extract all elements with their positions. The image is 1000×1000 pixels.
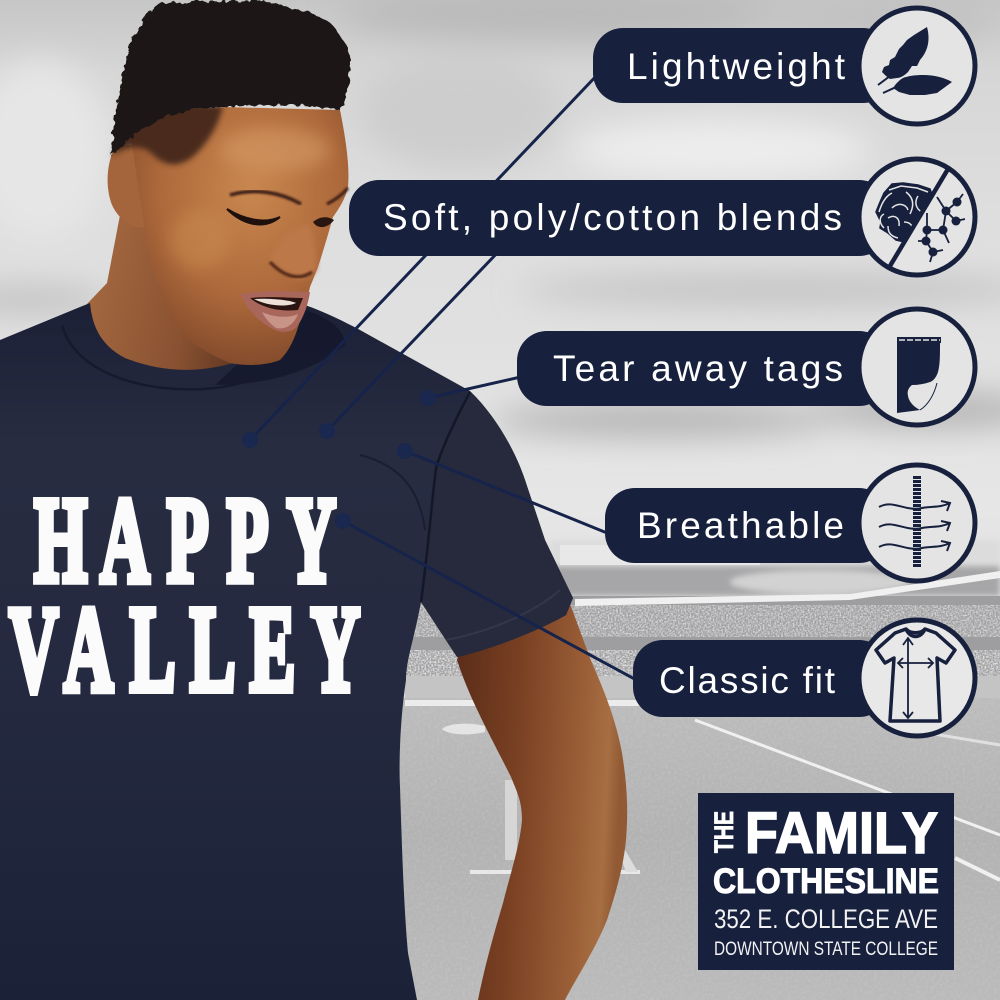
callout: Tear away tags <box>517 309 975 425</box>
callout: Soft, poly/cotton blends <box>349 159 975 275</box>
connector: Lightweight <box>242 72 600 448</box>
model: hair <box>112 0 350 164</box>
text: VALLEY: VALLEY <box>9 583 360 717</box>
logo: The Family Clothesline <box>698 793 954 970</box>
text: HAPPY: HAPPY <box>34 474 336 608</box>
text: FAMILY: FAMILY <box>745 801 938 866</box>
connector: Classic fit <box>335 513 640 682</box>
model: face <box>130 107 348 365</box>
text: location: DOWNTOWN STATE COLLEGE <box>714 939 938 960</box>
text: CLOTHESLINE: CLOTHESLINE <box>713 862 939 901</box>
model: t-shirt <box>0 303 573 1000</box>
icon: tear away tag <box>897 337 941 413</box>
connector: Soft blends <box>319 250 500 439</box>
background: football field <box>400 698 1000 1000</box>
label: Classic fit <box>659 660 836 701</box>
text: THE: THE <box>709 811 739 853</box>
pill <box>349 180 889 256</box>
background: stadium stands and crowd <box>405 540 1000 700</box>
icon: feathers <box>878 27 952 95</box>
callout: Classic fit <box>633 620 975 736</box>
background: stadium sky <box>0 0 1000 720</box>
pill <box>593 28 893 103</box>
logo panel <box>698 793 954 970</box>
icon: airflow through fabric <box>879 476 950 567</box>
connector: Breathable <box>397 443 612 535</box>
model: right arm <box>457 604 627 1000</box>
pill <box>517 331 889 406</box>
icon circle <box>859 8 975 124</box>
icon circle <box>859 309 975 425</box>
icon circle <box>859 159 975 275</box>
text: address: 352 E. COLLEGE AVE <box>714 904 938 934</box>
icon: t-shirt with measurements <box>876 629 955 721</box>
callout: Lightweight <box>593 8 975 124</box>
label: Tear away tags <box>553 348 843 389</box>
shirt graphic: HAPPY VALLEY <box>9 474 360 717</box>
label: Breathable <box>637 505 844 546</box>
connector: Tear away tags <box>420 376 525 406</box>
label: Soft, poly/cotton blends <box>383 197 842 238</box>
callout: Breathable <box>605 465 975 581</box>
pill <box>605 488 889 563</box>
icon circle <box>859 465 975 581</box>
model: ear <box>108 145 150 228</box>
icon: cotton and molecule crossed out <box>876 169 965 266</box>
pill <box>633 640 889 717</box>
model: neck <box>86 215 300 395</box>
label: Lightweight <box>627 46 846 87</box>
icon circle <box>859 620 975 736</box>
